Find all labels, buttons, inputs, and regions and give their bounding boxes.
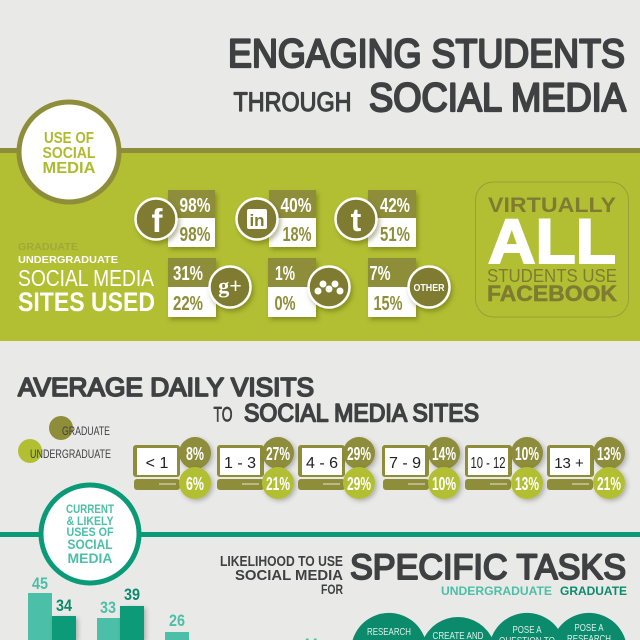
- chart: laptop visits 1 to 3: 1 - 3: [224, 455, 256, 472]
- callout: virtually all students use facebook: STUDENTS USE: [487, 266, 617, 286]
- callout: virtually all students use facebook: ALL: [488, 207, 616, 277]
- badge: twitter: [336, 190, 416, 247]
- heading: average daily visits: TO: [214, 404, 232, 426]
- badge: facebook: [136, 190, 215, 247]
- bar chart: current and likely uses: 34: [56, 596, 72, 615]
- chart: laptop visits under 1: 6%: [186, 474, 204, 494]
- badge: current and likely uses of social media: USES OF: [66, 527, 114, 539]
- legend: undergraduate graduate: UNDERGRADUATE: [441, 584, 552, 598]
- badge: current and likely uses of social media: MEDIA: [68, 550, 112, 566]
- badge: google plus: [168, 258, 250, 317]
- bar chart: current and likely uses: [28, 574, 318, 640]
- chart: laptop visits 10 to 12: 10 - 12: [470, 455, 506, 472]
- chart: laptop visits 4 to 6: [298, 437, 375, 499]
- chart: laptop visits 7 to 9: 14%: [432, 444, 456, 464]
- chart: laptop visits 4 to 6: 4 - 6: [306, 455, 338, 472]
- heading: social media sites used: GRADUATE: [18, 241, 78, 253]
- badge: use of social media circle: SOCIAL: [42, 145, 96, 162]
- badge: linkedin: in: [249, 211, 265, 230]
- chart: laptop visits 13 plus: [547, 437, 625, 499]
- chart: laptop visits 7 to 9: 7 - 9: [389, 455, 421, 472]
- legend: undergraduate graduate: GRADUATE: [560, 584, 627, 598]
- heading: average daily visits: SOCIAL MEDIA SITES: [244, 400, 479, 428]
- heading: average daily visits: [18, 372, 479, 428]
- panel: use of social media: [0, 102, 640, 341]
- badge: google plus: 22%: [173, 293, 203, 315]
- task circles: POSE A: [512, 624, 542, 636]
- heading: social media sites used: SOCIAL MEDIA: [18, 265, 155, 291]
- callout: virtually all students use facebook: FACEBOOK: [487, 281, 617, 306]
- chart: laptop visits 10 to 12: [465, 437, 543, 499]
- badge: other: 15%: [374, 293, 403, 315]
- legend: graduate and undergraduate: GRADUATE: [62, 424, 110, 438]
- heading: likelihood to use social media for specific tasks: FOR: [321, 581, 343, 597]
- heading: social media sites used: UNDERGRADUATE: [18, 254, 118, 266]
- chart: laptop visits 13 plus: 21%: [597, 474, 621, 494]
- heading: likelihood to use social media for specific tasks: [220, 547, 626, 597]
- badge: mendeley: 0%: [274, 293, 296, 315]
- chart: laptop visits 4 to 6: 29%: [347, 474, 371, 494]
- bar chart: current and likely uses: 39: [124, 585, 140, 604]
- badge: current and likely uses of social media: SOCIAL: [68, 536, 113, 552]
- heading: social media sites used: SITES USED: [18, 287, 155, 317]
- badge: current and likely uses of social media: CURRENT: [66, 504, 114, 516]
- bar chart: current and likely uses: 33: [100, 598, 116, 617]
- badge: google plus: g+: [218, 273, 242, 298]
- chart: laptop visits 13 plus: 13%: [597, 444, 621, 464]
- chart: laptop visits 10 to 12: 13%: [515, 474, 539, 494]
- chart: laptop visits 1 to 3: [217, 437, 294, 499]
- badge: twitter: t: [351, 202, 362, 238]
- heading: social media sites used: [18, 241, 155, 317]
- title: [228, 32, 627, 120]
- badge: use of social media circle: [19, 102, 119, 202]
- divider band: teal: [0, 532, 640, 537]
- legend: graduate and undergraduate: [18, 416, 111, 463]
- bar chart: current and likely uses: 45: [32, 574, 48, 593]
- badge: use of social media circle: MEDIA: [42, 160, 96, 177]
- chart: laptop visits 1 to 3: 27%: [266, 444, 290, 464]
- heading: average daily visits: AVERAGE DAILY VISITS: [18, 372, 314, 402]
- badge: twitter: 51%: [380, 224, 410, 246]
- bar chart: current and likely uses: 26: [169, 611, 185, 630]
- heading: likelihood to use social media for specific tasks: LIKELIHOOD TO USE: [220, 554, 343, 570]
- title: THROUGH: [234, 87, 352, 117]
- chart: laptop visits 7 to 9: 10%: [432, 474, 456, 494]
- badge: other: [368, 258, 450, 317]
- badge: linkedin: 18%: [282, 224, 312, 246]
- chart: laptop visits under 1: [133, 437, 211, 499]
- legend: graduate and undergraduate: UNDERGRADUATE: [30, 447, 111, 461]
- badge: other: 7%: [370, 263, 391, 285]
- badge: current and likely uses of social media: & LIKELY: [66, 516, 114, 528]
- badge: facebook: 98%: [180, 224, 211, 246]
- badge: use of social media circle: USE OF: [44, 130, 94, 147]
- chart: laptop visits 4 to 6: 29%: [347, 444, 371, 464]
- badge: current and likely uses of social media: [41, 485, 139, 583]
- chart: laptop visits 1 to 3: 21%: [266, 474, 290, 494]
- heading: likelihood to use social media for specific tasks: SOCIAL MEDIA: [235, 567, 343, 584]
- chart: laptop visits 7 to 9: [382, 437, 460, 499]
- task circles: RESEARCH: [367, 626, 411, 638]
- badge: google plus: 31%: [173, 263, 203, 285]
- badge: facebook: 98%: [180, 195, 211, 217]
- task circles: POSE A: [574, 622, 604, 634]
- badge: other: OTHER: [414, 283, 445, 294]
- badge: mendeley: [268, 258, 350, 317]
- chart: laptop visits 10 to 12: 10%: [515, 444, 539, 464]
- badge: linkedin: 40%: [280, 195, 312, 217]
- badge: linkedin: [236, 190, 316, 247]
- callout: virtually all students use facebook: VIRTUALLY: [488, 194, 616, 217]
- callout: virtually all students use facebook: [476, 182, 628, 317]
- task circles: [353, 613, 625, 640]
- heading: likelihood to use social media for specific tasks: SPECIFIC TASKS: [350, 547, 626, 587]
- chart: laptop visits under 1: < 1: [146, 455, 168, 472]
- legend: undergraduate graduate: [441, 584, 627, 598]
- chart: laptop visits 13 plus: 13 +: [554, 455, 584, 472]
- badge: mendeley: 1%: [275, 263, 295, 285]
- badge: facebook: f: [152, 202, 164, 239]
- chart: laptop visits under 1: 8%: [186, 444, 204, 464]
- badge: twitter: 42%: [380, 195, 410, 217]
